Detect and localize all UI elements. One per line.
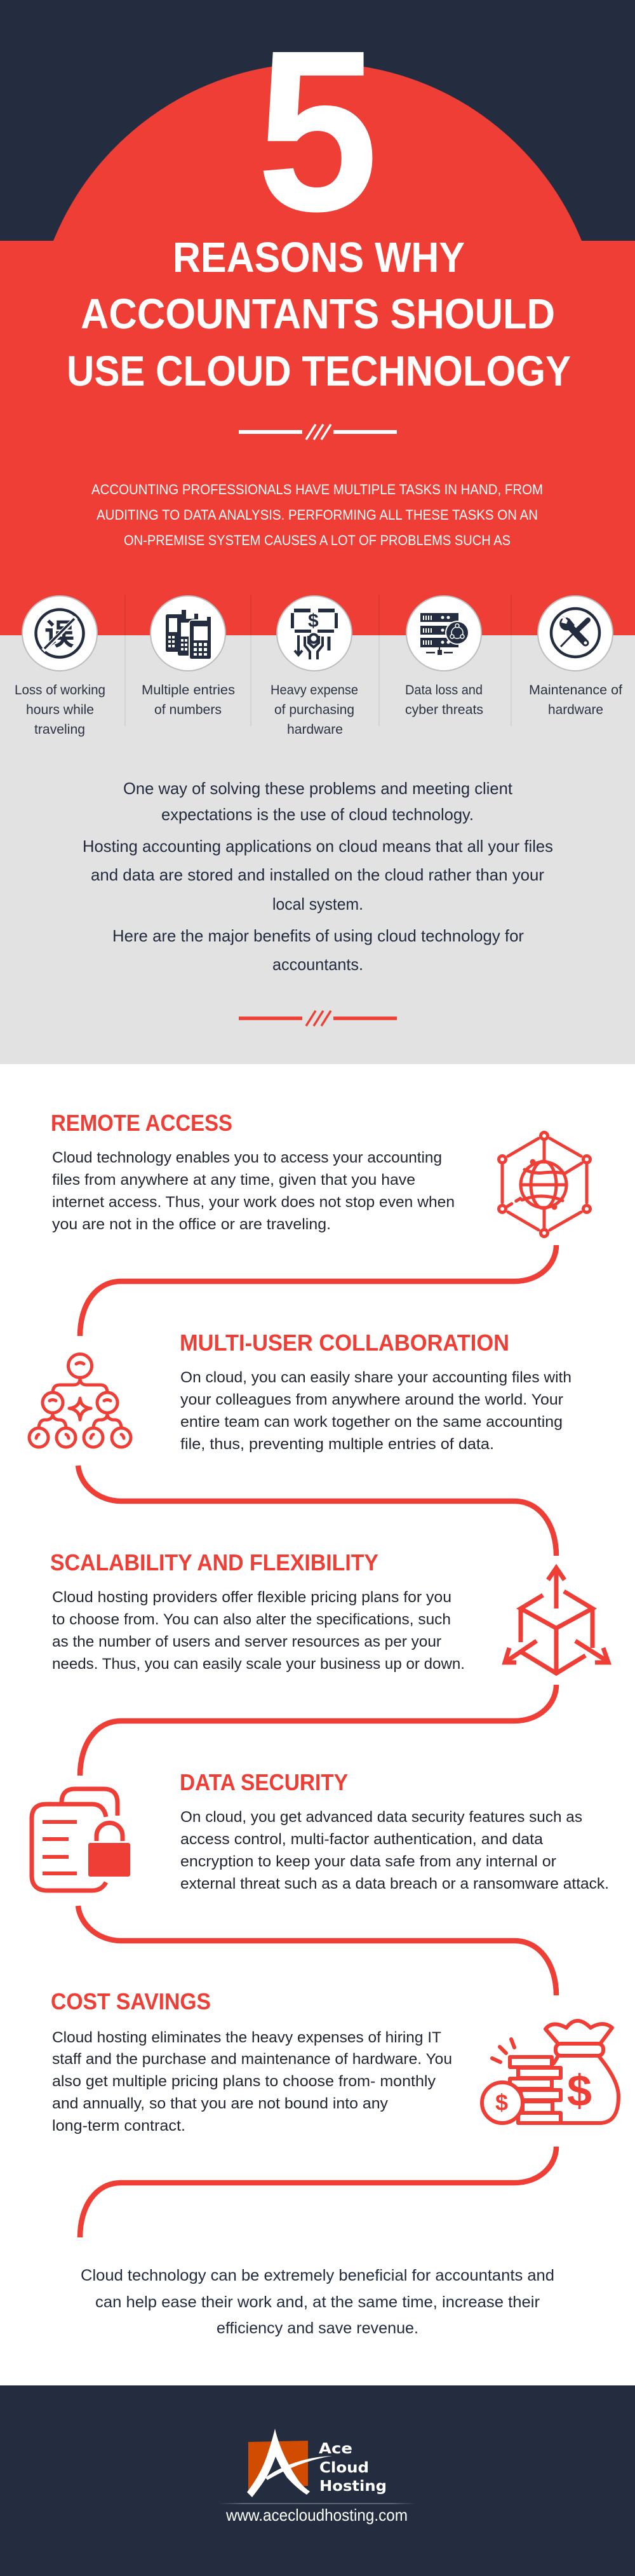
heading: COST SAVINGS [51,1988,211,2014]
body text: your colleagues from anywhere around the world. Your [180,1391,563,1408]
title: ACCOUNTANTS SHOULD [81,290,555,338]
icon: globe network [499,1132,591,1236]
body text [180,1809,609,1892]
intro text [91,482,543,548]
intro text: ON-PREMISE SYSTEM CAUSES A LOT OF PROBLEMS SUCH AS [124,532,511,548]
connector arrow 4 [78,1906,556,1995]
label: Heavy expense [271,682,358,698]
body text: also get multiple pricing plans to choose from- monthly [52,2073,436,2090]
heading: DATA SECURITY [180,1769,348,1795]
divider: red [239,1011,397,1026]
title [67,234,571,395]
problem 5: maintenance [529,596,622,717]
label: hours while [26,702,94,717]
icon: money bag and coins [482,2021,618,2123]
label [529,682,622,717]
problem 1: loss of working hours [15,596,105,737]
body text [52,2029,452,2134]
body text: Cloud hosting providers offer flexible pricing plans for you [52,1589,451,1606]
section: multi-user collaboration [29,1330,572,1453]
label [142,682,235,717]
introduction paragraphs: Here are the major benefits of using cloud technology for [112,926,524,945]
panel: header navy band [0,0,635,241]
logo mark [247,2429,332,2498]
icon: scaling cube [505,1568,608,1673]
body text: Cloud hosting eliminates the heavy expenses of hiring IT [52,2029,441,2046]
body text: access control, multi-factor authentication, and data [180,1831,543,1848]
body text: to choose from. You can also alter the specifications, such [52,1611,451,1628]
label [271,682,358,737]
heading: MULTI-USER COLLABORATION [180,1330,509,1356]
numeral 5: 5 [257,2,378,259]
label: Loss of working [15,682,105,698]
introduction paragraphs: accountants. [272,955,363,974]
connector arrow 1 [80,1245,556,1336]
panel: header red dome [0,63,635,635]
divider: white [239,424,397,440]
body text: On cloud, you get advanced data security features such as [180,1809,582,1826]
problem 4: data loss [405,596,483,717]
label: of numbers [154,702,222,717]
body text [52,1149,455,1233]
title: USE CLOUD TECHNOLOGY [67,347,571,395]
label: Maintenance of [529,682,622,698]
logo: Ace Cloud Hosting [247,2429,387,2498]
label: traveling [34,722,85,737]
body text: Cloud technology enables you to access your accounting [52,1149,442,1166]
panel: grey introduction area [0,635,635,1064]
logo wordmark: Ace [319,2441,352,2457]
body text: internet access. Thus, your work does not stop even when [52,1194,455,1211]
introduction paragraphs: One way of solving these problems and meeting client [123,779,513,798]
body text: and annually, so that you are not bound into any [52,2095,389,2112]
body text: entire team can work together on the same accounting [180,1413,563,1431]
body text: external threat such as a data breach or a ransomware attack. [180,1875,609,1892]
icon: money bag and coins: $ [567,2066,592,2115]
introduction paragraphs [83,779,553,974]
introduction paragraphs: local system. [272,894,363,914]
body text: long-term contract. [52,2117,185,2134]
label: hardware [548,702,603,717]
intro text: AUDITING TO DATA ANALYSIS. PERFORMING ALL THESE TASKS ON AN [97,507,538,523]
body text: files from anywhere at any time, given that you have [52,1171,415,1189]
introduction paragraphs: Hosting accounting applications on cloud means that all your files [83,837,553,856]
logo wordmark [319,2441,387,2495]
closing text: can help ease their work and, at the same time, increase their [95,2293,540,2311]
connector arrow 2 [78,1466,556,1556]
icon: hands holding a money screen [277,596,352,671]
icon: team hierarchy [29,1354,131,1447]
closing text: Cloud technology can be extremely beneficial for accountants and [81,2267,554,2284]
heading: SCALABILITY AND FLEXIBILITY [50,1549,378,1575]
body text: you are not in the office or are traveling. [52,1216,331,1233]
body text: file, thus, preventing multiple entries of data. [180,1436,494,1453]
label: cyber threats [405,702,483,717]
label [15,682,105,737]
heading: REMOTE ACCESS [51,1110,232,1136]
problem 2: multiple entries [142,596,235,717]
label: Data loss and [405,682,483,698]
footer rule [218,2503,416,2504]
icon: wrench and screwdriver [538,596,613,671]
section: scalability and flexibility [50,1549,608,1673]
icon: crossed-out character: 误 [44,610,74,654]
label: Multiple entries [142,682,235,698]
title: REASONS WHY [173,234,465,281]
intro text: ACCOUNTING PROFESSIONALS HAVE MULTIPLE TASKS IN HAND, FROM [91,482,543,497]
body text: needs. Thus, you can easily scale your business up or down. [52,1656,465,1673]
icon: money bag and coins: $ [495,2089,508,2115]
problem separators [125,594,511,726]
label: of purchasing [274,702,354,717]
icon: three keypads [150,596,225,671]
body text: encryption to keep your data safe from any internal or [180,1853,556,1870]
closing text: efficiency and save revenue. [217,2319,418,2337]
icon: crossed-out character [22,596,97,671]
icon: server with threat badge [406,596,481,671]
body text: as the number of users and server resources as per your [52,1633,441,1650]
introduction paragraphs: and data are stored and installed on the cloud rather than your [91,865,544,884]
body text: On cloud, you can easily share your accounting files with [180,1369,572,1386]
connector arrow 5 [80,2147,556,2237]
closing text [81,2267,554,2337]
body text [52,1589,465,1673]
logo wordmark: Hosting [319,2478,387,2495]
panel: footer [0,2385,635,2576]
problem 3: heavy expense [271,596,358,737]
connector arrow 3 [80,1685,556,1776]
icon: document with padlock [32,1789,130,1891]
section: cost savings [51,1988,618,2134]
section: data security [32,1769,609,1892]
section: remote access [51,1110,591,1236]
label [405,682,483,717]
website address: www.acecloudhosting.com [225,2505,408,2525]
introduction paragraphs: expectations is the use of cloud technology. [161,805,474,824]
icon: hands holding a money screen: $ [308,610,319,631]
label: hardware [287,722,343,737]
body text: staff and the purchase and maintenance of hardware. You [52,2051,452,2068]
body text [180,1369,572,1453]
logo wordmark: Cloud [319,2460,369,2476]
